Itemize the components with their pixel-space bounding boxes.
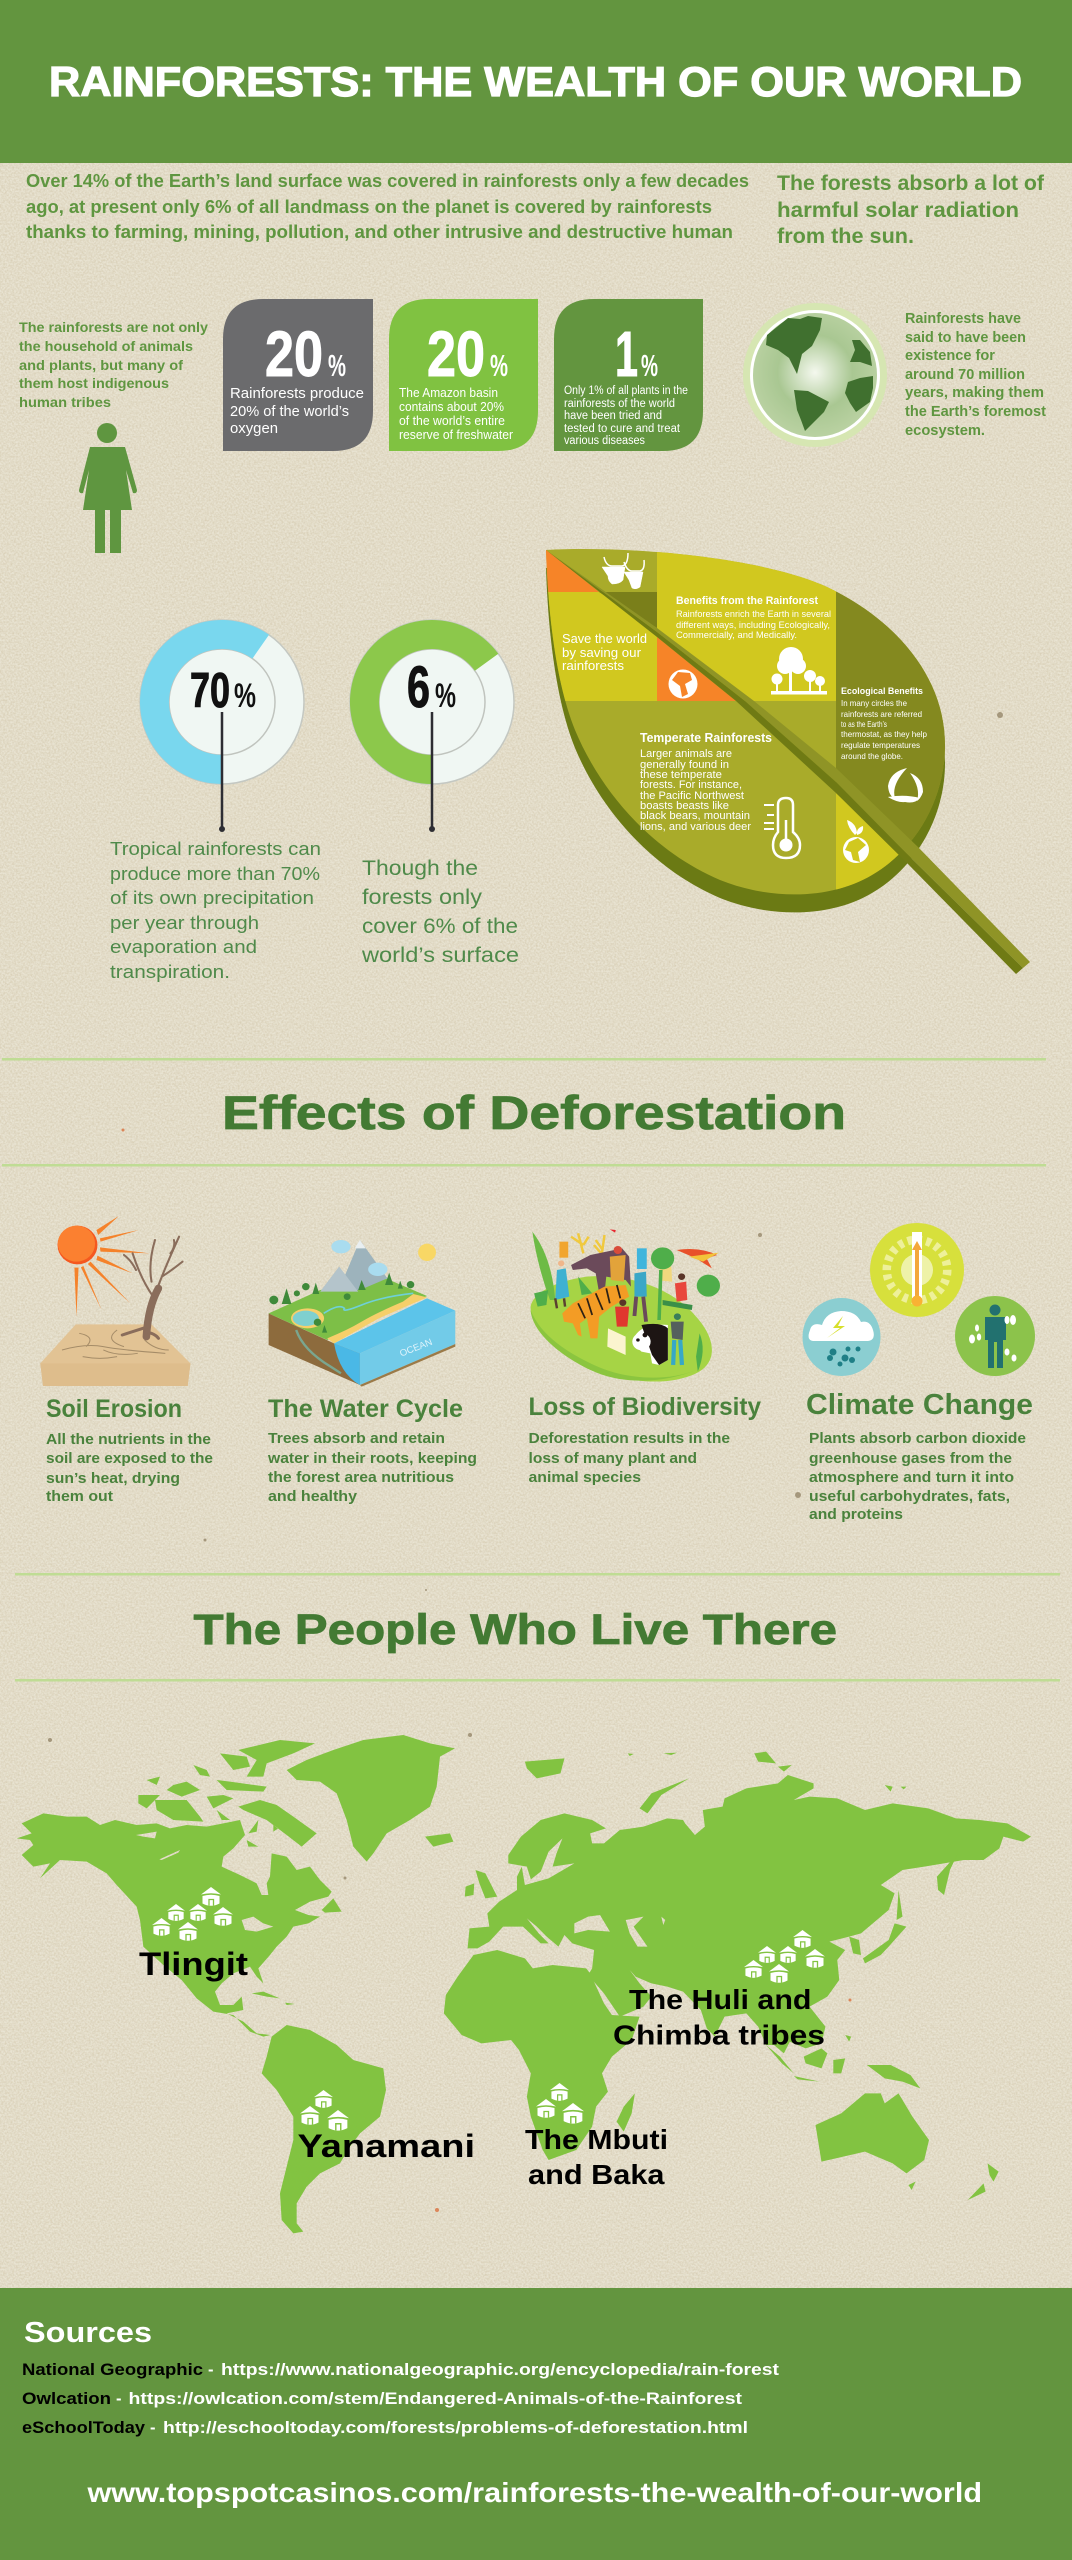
source: eschooltoday xyxy=(22,2419,748,2437)
source: owlcation: https://owlcation.com/stem/Endangered-Animals-of-the-Rainforest xyxy=(128,2390,743,2408)
leaf text: benefits from the rainforest: Commercially, and Medically. xyxy=(676,630,797,641)
icon: trees xyxy=(771,647,827,694)
leaf text: temperate rainforests: lions, and various deer xyxy=(640,821,751,833)
leaf text: ecological benefits: In many circles the xyxy=(841,698,907,708)
leaf text: benefits from the rainforest: Rainforests enrich the Earth in several xyxy=(676,609,831,620)
source: national geographic: - xyxy=(208,2361,214,2379)
source: national geographic xyxy=(22,2361,780,2379)
title: RAINFORESTS: THE WEALTH OF OUR WORLD xyxy=(49,58,1022,105)
water cycle body text: Trees absorb and retain xyxy=(268,1431,445,1447)
leaf text: save the world: by saving our xyxy=(562,646,641,660)
icon: cows xyxy=(602,553,644,589)
stat card: 20% oxygen: 20 xyxy=(265,318,323,390)
climate change body text xyxy=(809,1431,1026,1523)
chart: 6% surface donut: % xyxy=(435,677,456,715)
leaf text: save the world xyxy=(562,632,647,673)
soil erosion body text: All the nutrients in the xyxy=(46,1432,211,1448)
chart: 70% precipitation donut: 70 xyxy=(190,664,230,718)
water cycle body text: the forest area nutritious xyxy=(268,1470,454,1486)
leaf diagram xyxy=(540,540,1030,974)
leaf text: benefits from the rainforest: Benefits from the Rainforest xyxy=(676,595,818,607)
stat card: 20% oxygen: 20% of the world’s xyxy=(230,403,349,420)
stat card: 20% oxygen xyxy=(223,299,373,451)
loss of biodiversity body text: loss of many plant and xyxy=(528,1451,697,1467)
leaf text: ecological benefits: regulate temperatures xyxy=(841,740,920,750)
map: greenland xyxy=(287,1735,455,1862)
leaf text: temperate rainforests: boasts beasts like xyxy=(640,800,729,812)
map: eurasia xyxy=(468,1775,1031,2053)
source: national geographic: https://www.nationalgeographic.org/encyclopedia/rain-forest xyxy=(221,2361,780,2379)
map: north and central america xyxy=(17,1813,332,2037)
leaf text: temperate rainforests: forests. For instance, xyxy=(640,779,742,791)
section heading: the people who live there: The People Who Live There xyxy=(194,1606,837,1654)
water cycle body text: water in their roots, keeping xyxy=(267,1451,477,1467)
stat card: 1% plants: tested to cure and treat xyxy=(564,423,681,435)
leaf text: temperate rainforests: these temperate xyxy=(640,769,722,781)
intro text block: thanks to farming, mining, pollution, and other intrusive and destructive human xyxy=(26,221,733,242)
precipitation text block: per year through xyxy=(110,912,259,933)
intro text block: ago, at present only 6% of all landmass on the planet is covered by rainforests xyxy=(26,196,712,217)
soil erosion body text xyxy=(46,1432,213,1505)
icon: sun with thermometer xyxy=(870,1223,964,1317)
map: europe asia africa australia xyxy=(444,1752,1031,2200)
ecosystem age text block: ecosystem. xyxy=(905,423,985,439)
section heading: effects of deforestation: Effects of Deforestation xyxy=(222,1086,846,1139)
leaf text: temperate rainforests: black bears, mountain xyxy=(640,810,750,822)
stat card: 1% plants: rainforests of the world xyxy=(564,398,675,410)
stat card: 20% freshwater: 20 xyxy=(427,318,485,390)
panel: loss of biodiversity: Loss of Biodiversity xyxy=(528,1393,761,1421)
label: yanamani: Yanamani xyxy=(298,2128,475,2164)
illustration: sun and dry tree xyxy=(40,1216,190,1386)
leaf text: temperate rainforests xyxy=(640,731,772,833)
icon: earth xyxy=(668,670,698,698)
panel: water cycle: The Water Cycle xyxy=(268,1395,463,1423)
map: australia and new zealand xyxy=(816,2093,999,2200)
stat card: 20% freshwater: contains about 20% xyxy=(399,400,504,414)
forest cover text block xyxy=(361,857,519,967)
panel: soil erosion xyxy=(40,1216,213,1505)
label: mbuti and baka xyxy=(525,2124,668,2190)
stat card: 20% freshwater: % xyxy=(490,348,508,383)
leaf text: ecological benefits: around the globe. xyxy=(841,751,903,761)
label: huli and chimba xyxy=(613,1984,825,2050)
ecosystem age text block: around 70 million xyxy=(905,367,1025,383)
stat card: 20% freshwater: reserve of freshwater xyxy=(399,428,513,442)
ecosystem age text block: existence for xyxy=(905,348,995,364)
stat card: 20% oxygen: Rainforests produce xyxy=(230,385,364,402)
footer banner xyxy=(0,2288,1072,2560)
icon: storm cloud xyxy=(802,1298,880,1376)
forest cover text block: cover 6% of the xyxy=(362,915,518,938)
leaf text: temperate rainforests: generally found in xyxy=(640,759,729,771)
stat card: 20% freshwater: The Amazon basin xyxy=(399,386,498,400)
climate change body text: atmosphere and turn it into xyxy=(809,1470,1014,1486)
illustration: isometric water cycle: OCEAN xyxy=(398,1337,434,1359)
source: eschooltoday: http://eschooltoday.com/forests/problems-of-deforestation.html xyxy=(163,2419,748,2437)
label: mbuti and baka: and Baka xyxy=(528,2159,665,2190)
intro text block xyxy=(26,170,749,242)
solar radiation text block xyxy=(777,171,1045,248)
precipitation text block: of its own precipitation xyxy=(110,887,314,908)
panel: loss of biodiversity xyxy=(528,1229,761,1486)
leaf text: benefits from the rainforest xyxy=(676,595,831,641)
indigenous tribes text block xyxy=(19,319,208,410)
stat card: 1% plants: Only 1% of all plants in the xyxy=(564,385,688,397)
leaf text: ecological benefits: thermostat, as they help xyxy=(841,729,927,739)
indigenous tribes text block: The rainforests are not only xyxy=(19,319,208,335)
ecosystem age text block: said to have been xyxy=(905,330,1026,346)
stat card: 20% oxygen: oxygen xyxy=(230,420,278,437)
huts: north america xyxy=(152,1887,233,1941)
header banner xyxy=(0,0,1072,163)
icon: globe xyxy=(743,303,887,447)
leaf text: temperate rainforests: Larger animals are xyxy=(640,748,732,760)
label: mbuti and baka: The Mbuti xyxy=(525,2124,668,2155)
map: americas and greenland xyxy=(17,1735,455,2233)
precipitation text block xyxy=(110,838,321,982)
map: islands xyxy=(465,1752,958,2132)
ecosystem age text block: the Earth’s foremost xyxy=(905,404,1046,420)
map: africa xyxy=(444,1950,640,2160)
climate change body text: Plants absorb carbon dioxide xyxy=(809,1431,1026,1447)
forest cover text block: Though the xyxy=(362,857,478,880)
chart: 6% surface donut xyxy=(350,620,514,832)
icon: thermometer xyxy=(764,798,800,858)
climate change body text: and proteins xyxy=(809,1507,903,1523)
soil erosion body text: them out xyxy=(46,1489,113,1505)
source: eschooltoday: - xyxy=(150,2419,156,2437)
illustration: animals and people on island xyxy=(531,1229,720,1382)
indigenous tribes text block: them host indigenous xyxy=(19,375,169,391)
map: south america xyxy=(262,2025,386,2233)
precipitation text block: Tropical rainforests can xyxy=(110,838,321,859)
panel: water cycle xyxy=(267,1240,477,1505)
illustration: isometric water cycle xyxy=(269,1240,455,1387)
indigenous tribes text block: and plants, but many of xyxy=(19,357,183,373)
soil erosion body text: sun’s heat, drying xyxy=(46,1471,180,1487)
stat card: 1% plants: have been tried and xyxy=(564,410,662,422)
huts: asia xyxy=(744,1930,825,1983)
panel: climate change: Climate Change xyxy=(806,1389,1033,1421)
ecosystem age text block: Rainforests have xyxy=(905,311,1021,327)
loss of biodiversity body text: animal species xyxy=(528,1470,641,1486)
source: owlcation: - xyxy=(116,2390,122,2408)
leaf text: ecological benefits: to as the Earth’s xyxy=(841,719,887,729)
label: huli and chimba: The Huli and xyxy=(629,1984,812,2015)
map: arctic islands and caribbean xyxy=(138,1740,453,2005)
loss of biodiversity body text xyxy=(528,1431,730,1486)
solar radiation text block: harmful solar radiation xyxy=(777,198,1019,222)
water cycle body text xyxy=(267,1431,477,1505)
forest cover text block: forests only xyxy=(362,886,483,909)
stat card: 1% plants: % xyxy=(641,348,658,383)
icon: earth with sprout xyxy=(843,820,869,863)
chart: 70% precipitation donut: % xyxy=(234,677,256,715)
source: national geographic: National Geographic xyxy=(22,2361,203,2379)
huts: africa xyxy=(536,2083,584,2124)
indigenous tribes text block: the household of animals xyxy=(19,338,193,354)
soil erosion body text: soil are exposed to the xyxy=(46,1451,213,1467)
leaf text: temperate rainforests: the Pacific Northwest xyxy=(640,790,744,802)
precipitation text block: evaporation and xyxy=(110,936,257,957)
ecosystem age text block xyxy=(905,311,1046,439)
leaf text: ecological benefits xyxy=(841,686,927,761)
label: huli and chimba: Chimba tribes xyxy=(613,2020,825,2050)
icon: woman figure xyxy=(79,423,137,553)
indigenous tribes text block: human tribes xyxy=(19,394,111,410)
stat card: 20% freshwater xyxy=(389,299,538,451)
label: tlingit: Tlingit xyxy=(139,1946,248,1982)
sources heading: Sources xyxy=(24,2317,152,2349)
leaf text: ecological benefits: Ecological Benefits xyxy=(841,686,923,697)
source: eschooltoday: eSchoolToday xyxy=(22,2419,146,2437)
leaf text: benefits from the rainforest: different ways, including Ecologically, xyxy=(676,620,830,631)
website url: www.topspotcasinos.com/rainforests-the-wealth-of-our-world xyxy=(86,2477,982,2508)
panel: soil erosion: Soil Erosion xyxy=(46,1395,182,1423)
climate change body text: useful carbohydrates, fats, xyxy=(809,1489,1010,1505)
stat card: 20% oxygen: % xyxy=(328,348,346,383)
leaf text: save the world: Save the world xyxy=(562,632,647,646)
leaf text: save the world: rainforests xyxy=(562,659,624,673)
stat card: 1% plants xyxy=(554,299,703,451)
leaf text: ecological benefits: rainforests are referred xyxy=(841,709,922,719)
leaf text: temperate rainforests: Temperate Rainforests xyxy=(640,731,772,745)
leaf midrib and stem xyxy=(546,550,1030,974)
intro text block: Over 14% of the Earth’s land surface was covered in rainforests only a few decades xyxy=(26,170,749,191)
stat card: 1% plants: various diseases xyxy=(564,435,645,447)
stat card: 20% freshwater: of the world’s entire xyxy=(399,414,505,428)
world map xyxy=(17,1735,1031,2233)
loss of biodiversity body text: Deforestation results in the xyxy=(528,1431,730,1447)
source: owlcation: Owlcation xyxy=(22,2390,111,2408)
chart: 70% precipitation donut xyxy=(140,620,304,832)
precipitation text block: transpiration. xyxy=(110,961,230,982)
precipitation text block: produce more than 70% xyxy=(110,863,320,884)
huts: south america xyxy=(300,2090,349,2131)
chart: 6% surface donut: 6 xyxy=(407,655,430,720)
ecosystem age text block: years, making them xyxy=(905,385,1044,401)
icon: person in rain xyxy=(955,1296,1035,1376)
icon: recycling leaves xyxy=(888,768,923,802)
solar radiation text block: from the sun. xyxy=(777,224,914,248)
solar radiation text block: The forests absorb a lot of xyxy=(777,171,1045,195)
climate change body text: greenhouse gases from the xyxy=(809,1451,1012,1467)
water cycle body text: and healthy xyxy=(268,1489,357,1505)
stat card: 1% plants: 1 xyxy=(615,318,638,390)
panel: climate change xyxy=(802,1223,1035,1523)
forest cover text block: world’s surface xyxy=(361,944,519,967)
